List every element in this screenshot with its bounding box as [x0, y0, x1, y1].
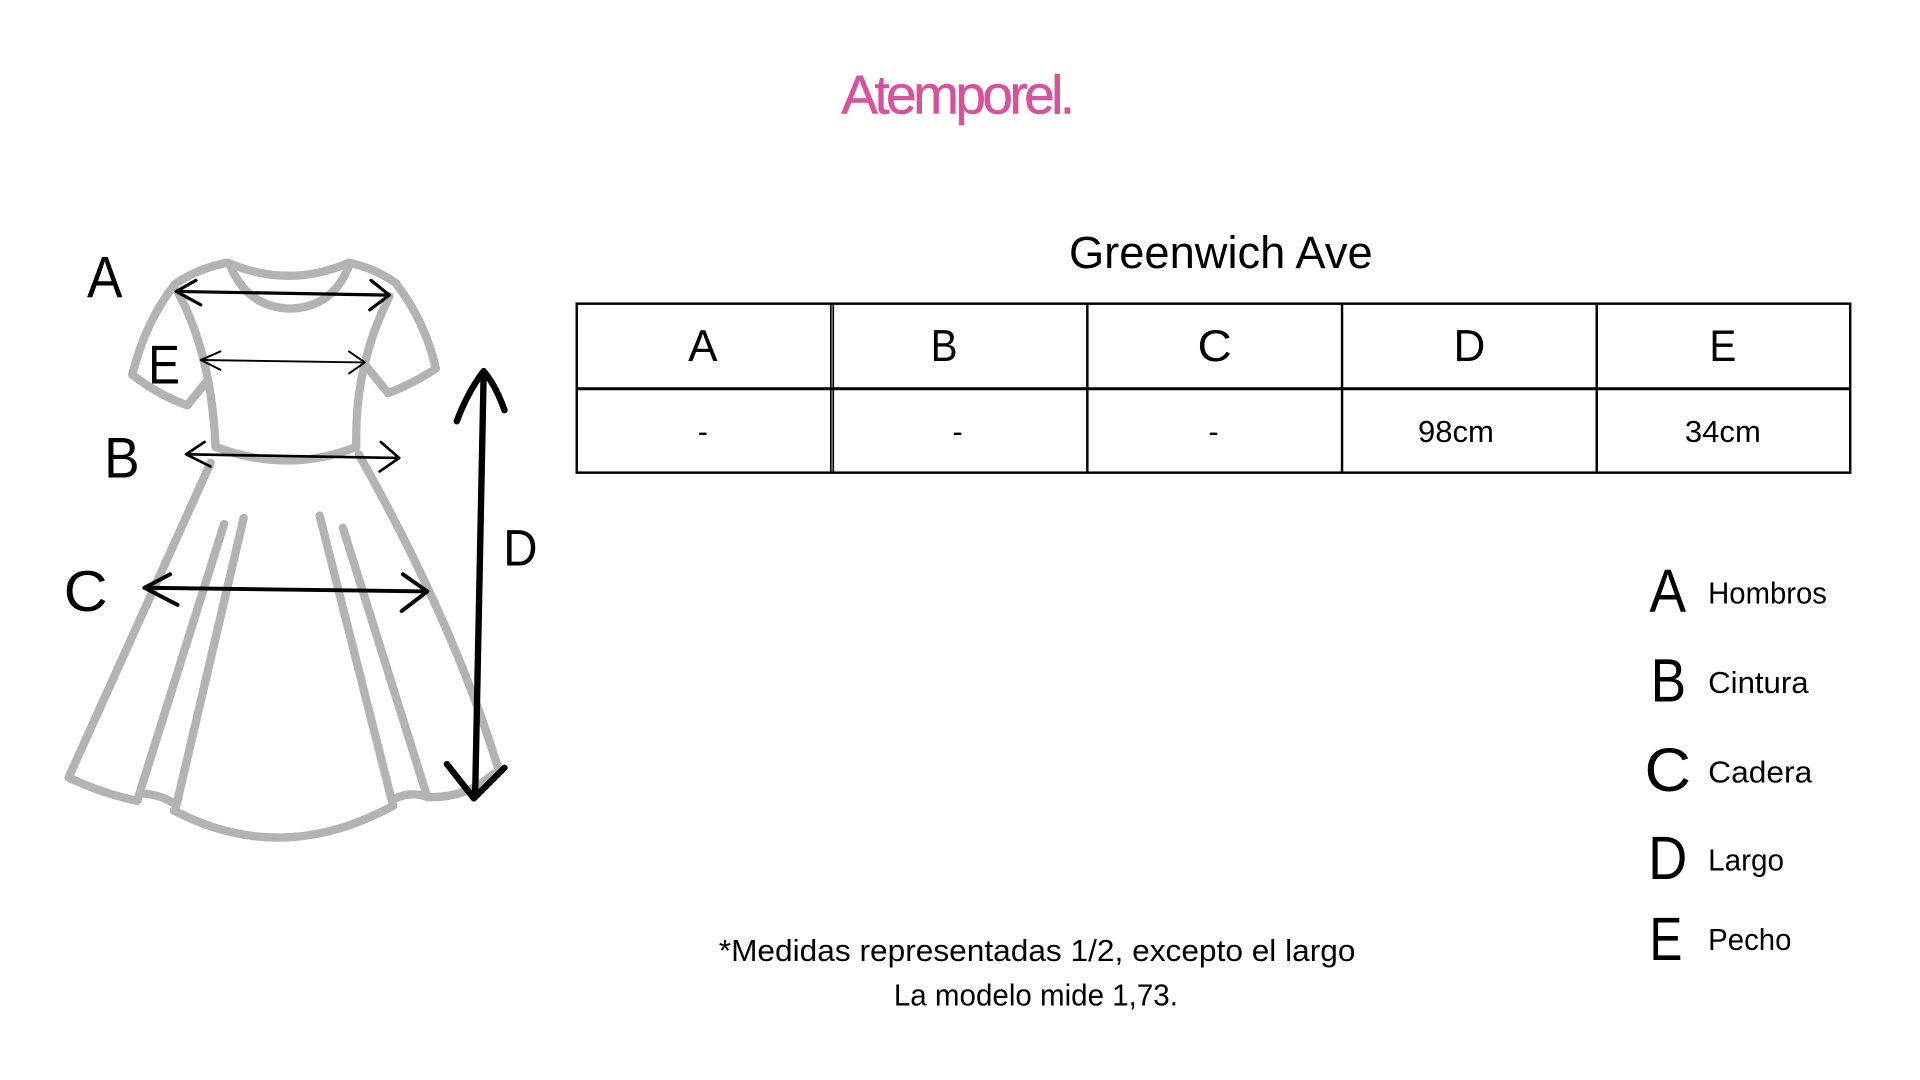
legend letters: D [1648, 824, 1687, 892]
table values: - [952, 415, 963, 449]
legend labels: Pecho [1708, 923, 1791, 957]
dress outline [69, 263, 498, 838]
table header [688, 322, 1736, 371]
legend labels [1708, 577, 1827, 957]
arrow A [176, 280, 389, 310]
footnote: *Medidas representadas 1/2, excepto el largo [719, 934, 1356, 968]
table values: - [698, 415, 708, 449]
legend letters: C [1644, 736, 1691, 804]
legend labels: Cintura [1708, 666, 1810, 700]
legend letters: A [1649, 557, 1686, 625]
arrow C [144, 574, 427, 611]
legend [1644, 557, 1827, 973]
footnote [719, 934, 1356, 1012]
letter B: B [104, 427, 140, 491]
table values: 34cm [1685, 415, 1761, 449]
legend letters: B [1651, 647, 1686, 715]
arrow D [447, 371, 504, 798]
arrow E [201, 351, 365, 373]
dress diagram [64, 246, 538, 838]
letter A: A [87, 246, 123, 311]
legend labels: Largo [1708, 844, 1784, 878]
table header: B [931, 322, 958, 371]
legend letters: E [1649, 905, 1682, 973]
letter C: C [64, 560, 108, 624]
table header: E [1709, 322, 1736, 371]
table values: 98cm [1418, 415, 1494, 449]
table values: - [1208, 415, 1219, 449]
legend labels: Hombros [1708, 577, 1827, 611]
table header: A [688, 322, 718, 371]
table values [698, 415, 1761, 449]
letter D: D [503, 519, 538, 577]
table grid [577, 304, 1850, 473]
legend letters [1644, 557, 1691, 973]
table header: D [1453, 322, 1485, 371]
footnote: La modelo mide 1,73. [894, 978, 1178, 1012]
legend labels: Cadera [1708, 755, 1813, 789]
table header: C [1198, 322, 1232, 371]
size table [577, 304, 1850, 473]
letter E: E [148, 333, 180, 395]
logo: Atemporel. [841, 63, 1075, 125]
product title: Greenwich Ave [1069, 227, 1373, 278]
arrow B [186, 442, 399, 471]
